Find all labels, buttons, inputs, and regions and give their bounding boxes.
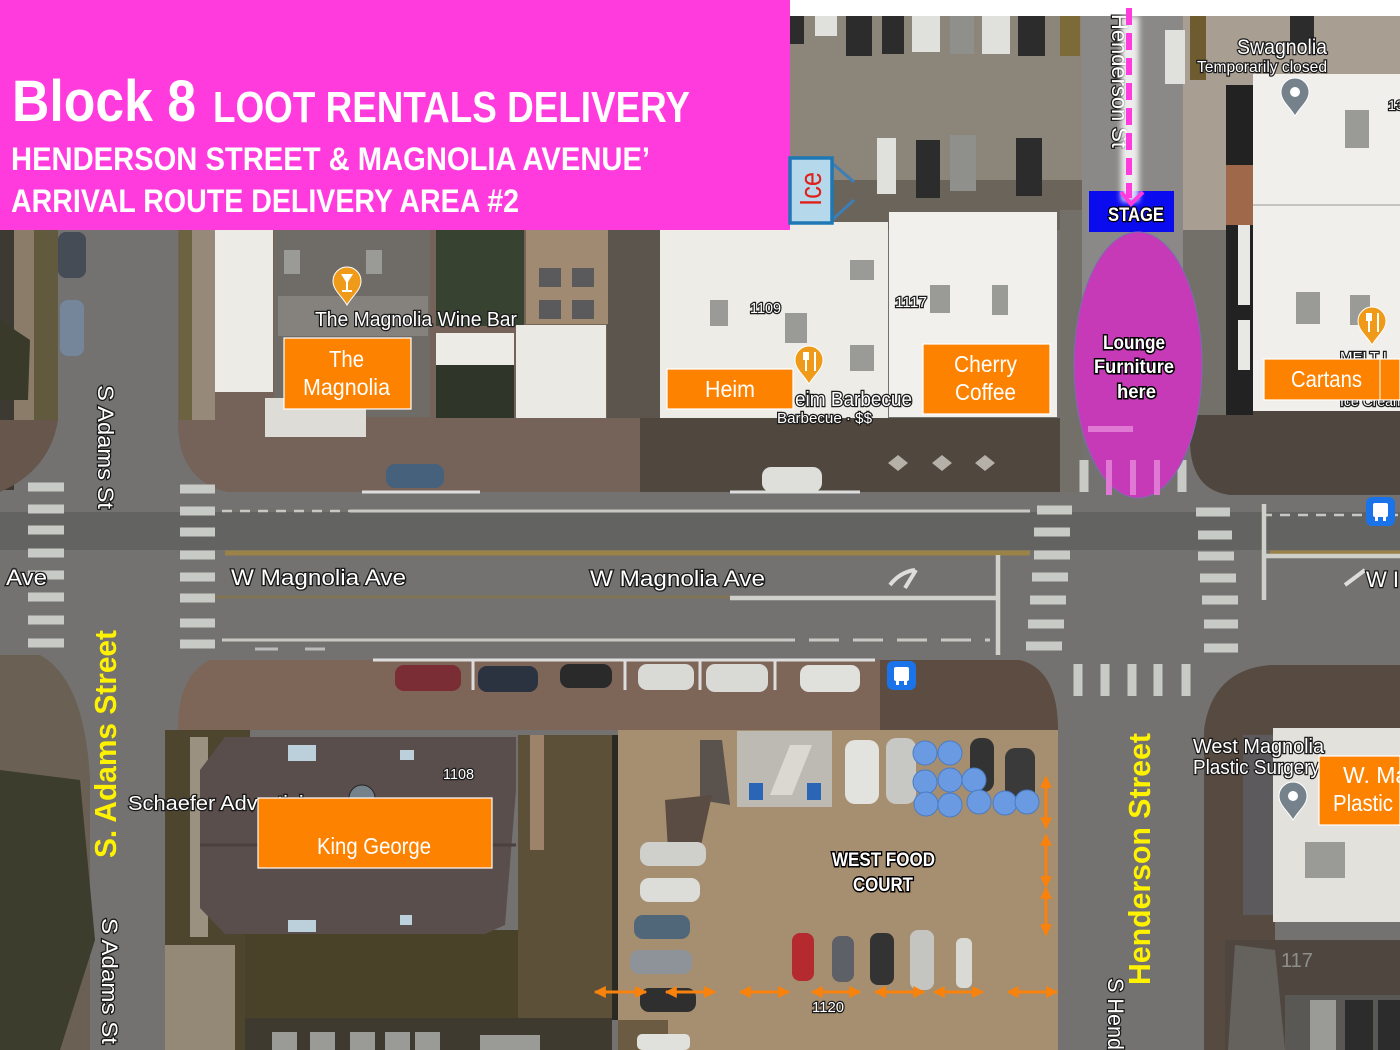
map place labels: The Magnolia Wine Bar (315, 309, 517, 331)
street name: S. Adams Street: S. Adams Street (88, 630, 123, 858)
map place labels: Swagnolia (1237, 36, 1327, 59)
title banner: ARRIVAL ROUTE DELIVERY AREA #2 (11, 183, 519, 219)
map place labels: S Adams St (97, 918, 122, 1044)
west food court label: COURT (853, 875, 913, 896)
stage: STAGE (1108, 205, 1164, 226)
title banner: Block 8 (12, 69, 196, 134)
ice label: Ice (793, 172, 828, 206)
map place labels: West Magnolia (1193, 736, 1325, 758)
lounge furniture area: Furniture (1094, 357, 1174, 378)
buildings (200, 74, 1400, 934)
map place labels: Temporarily closed (1197, 59, 1327, 76)
orange business labels: Coffee (955, 379, 1016, 405)
map place labels: Schaefer Advertising (128, 793, 328, 815)
map place labels: Plastic Surgery (1193, 757, 1320, 779)
arrival route arrow (1121, 8, 1143, 204)
map place labels: Ave (6, 565, 47, 590)
orange business labels: Magnolia (303, 374, 390, 400)
map place labels: eim Barbecue (795, 389, 912, 411)
blue circles (913, 741, 1039, 817)
orange business labels: Heim (705, 376, 755, 402)
title banner (0, 0, 790, 230)
west food court label (832, 850, 935, 896)
orange business labels (258, 338, 1400, 868)
map place labels: 1117 (895, 294, 927, 311)
map place labels: W I (1366, 567, 1399, 592)
orange business labels: King George (317, 833, 431, 859)
lounge furniture area (1074, 232, 1202, 498)
lounge furniture area: here (1117, 382, 1156, 403)
orange business labels: The (329, 346, 364, 372)
map place labels: Henderson St (1107, 14, 1132, 148)
map place labels: 1109 (750, 300, 781, 317)
orange business labels: Plastic (1333, 790, 1393, 816)
title banner: LOOT RENTALS DELIVERY (213, 83, 690, 132)
map place labels: W Magnolia Ave (231, 565, 406, 590)
map place labels: MELT I (1340, 349, 1387, 366)
ice label (790, 158, 854, 223)
icon: transit stops (887, 497, 1395, 690)
west food court label: WEST FOOD (832, 850, 935, 871)
title banner: HENDERSON STREET & MAGNOLIA AVENUE’ (11, 141, 650, 177)
map place labels: W Magnolia Ave (590, 566, 765, 591)
stage (1089, 191, 1174, 232)
map place labels: 1120 (812, 999, 844, 1016)
orange business labels: Cherry (954, 351, 1017, 377)
map place labels: S Hend (1103, 978, 1128, 1050)
street name: Henderson Street: Henderson Street (1122, 733, 1157, 985)
map place labels: 1108 (443, 766, 474, 783)
orange business labels: Cartans (1291, 366, 1362, 392)
icon: map pins (333, 78, 1386, 820)
map place labels: 117 (1281, 950, 1313, 972)
lounge furniture area: Lounge (1103, 333, 1165, 354)
map place labels: S Adams St (93, 385, 118, 509)
map place labels: Barbecue · $$ (777, 410, 873, 427)
orange dimension arrows (595, 777, 1057, 992)
